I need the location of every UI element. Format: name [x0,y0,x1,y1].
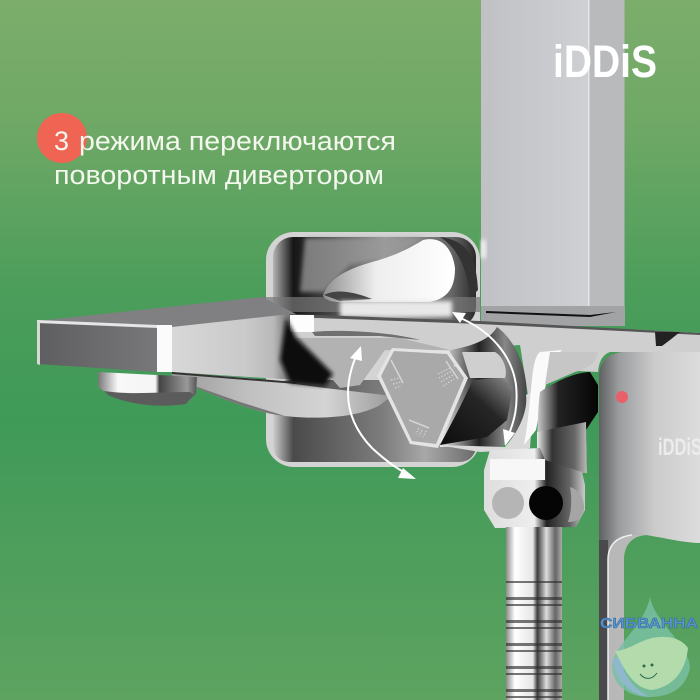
bath face [640,664,657,678]
aerator [98,372,197,406]
heading text: режима переключаются [79,126,396,156]
diverter handle [440,378,513,445]
diverter collar [440,327,527,447]
shower column [481,0,625,326]
mode icon: overhead shower [438,361,458,386]
rotation arrow: left [348,346,416,479]
watermark logo [600,597,699,697]
brand logo: iDDiS [553,36,657,87]
hex nut [484,448,585,528]
nut dark facet [529,486,563,520]
knob on plate [323,239,455,302]
nut facet [492,487,524,519]
wall plate [262,232,480,467]
mode icon: spout [409,420,429,437]
translucent reflection band [262,297,480,312]
spout end face [37,321,158,372]
underside shade [172,378,285,416]
shower outlet elbow [537,372,598,473]
heading with number badge [37,113,404,190]
spout side face [172,314,296,380]
main horizontal body [290,316,700,395]
dark notch [280,318,333,386]
watermark text: СИБВАННА [600,616,699,632]
nut right facet [568,487,584,522]
bright edge strip [157,325,172,372]
mixer lever [599,352,700,700]
small joint detail [655,332,680,346]
heading text: 3 [54,126,69,156]
diverter hex knob [377,348,468,448]
spout top face [37,297,300,327]
highlight block [290,315,314,332]
mode icon: hand shower [391,360,403,388]
lower body band [172,372,392,418]
spout and body [37,314,700,418]
watermark bath [615,637,688,690]
lower body shelf [438,390,534,452]
number badge [37,113,87,163]
red indicator dot [616,391,628,403]
shower hose [506,527,562,700]
watermark drop [612,597,690,697]
heading text: поворотным дивертором [54,160,384,190]
rotation arrow: right [452,312,517,446]
top shading [300,238,425,292]
